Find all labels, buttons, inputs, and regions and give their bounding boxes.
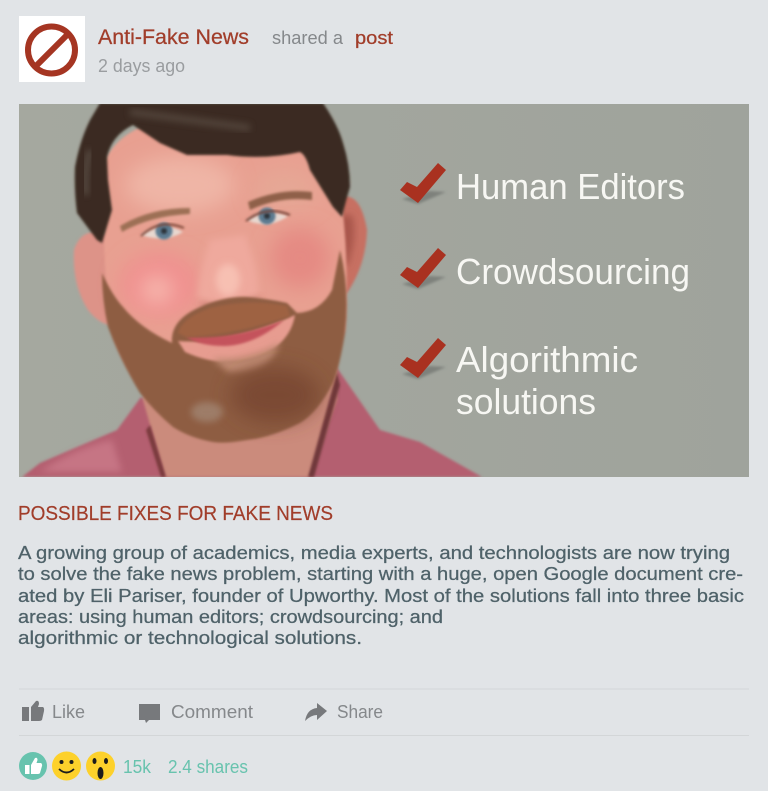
checklist item: Crowdsourcing: Crowdsourcing — [456, 251, 690, 292]
checklist item: Algorithmic solutions — [400, 338, 638, 422]
icon: wow reaction — [86, 752, 115, 780]
body text — [18, 543, 744, 648]
heading: POSSIBLE FIXES FOR FAKE NEWS — [18, 503, 333, 525]
body text: ated by Eli Pariser, founder of Upworthy. Most of the solutions fall into three basic — [18, 586, 744, 606]
checklist item: Algorithmic solutions: Algorithmic — [456, 339, 638, 380]
eyebrows — [120, 208, 190, 232]
action bar — [22, 701, 383, 723]
face — [104, 128, 348, 344]
beard and moustache — [102, 250, 347, 443]
checklist item: Human Editors: Human Editors — [456, 166, 685, 207]
share action — [305, 702, 383, 722]
ears — [74, 232, 112, 325]
lips and chin — [178, 315, 295, 362]
comment action: Comment — [171, 702, 253, 722]
body text: A growing group of academics, media experts, and technologists are now trying — [18, 543, 730, 563]
author name: Anti-Fake News — [98, 26, 249, 49]
icon: prohibition sign avatar — [19, 16, 85, 82]
like count: 15k — [123, 757, 152, 777]
share action: Share — [337, 702, 383, 722]
beard shading — [230, 367, 320, 423]
cheeks — [122, 254, 196, 316]
shirt — [22, 368, 482, 477]
post link: post — [355, 28, 393, 48]
forehead highlight — [125, 157, 235, 213]
body text: to solve the fake news problem, starting with a huge, open Google document cre- — [18, 564, 743, 584]
like action: Like — [52, 702, 85, 722]
neck — [142, 372, 338, 477]
nose — [198, 238, 257, 300]
comment action — [139, 702, 253, 723]
body text: algorithmic or technological solutions. — [18, 628, 362, 648]
checklist item: Algorithmic solutions: solutions — [456, 381, 596, 422]
icon: smile reaction — [52, 752, 81, 780]
body text: areas: using human editors; crowdsourcing; and — [18, 607, 443, 627]
timestamp: 2 days ago — [98, 56, 185, 76]
portrait of Eli Pariser — [22, 103, 482, 477]
like action — [22, 701, 85, 722]
hair — [75, 103, 350, 243]
post header — [19, 16, 393, 82]
eyes — [141, 208, 290, 240]
share count: 2.4 shares — [168, 757, 248, 777]
panel: photo with checklist — [19, 103, 749, 477]
shared a label: shared a — [272, 28, 344, 48]
icon: like reaction — [19, 752, 47, 780]
reactions row — [19, 752, 248, 780]
